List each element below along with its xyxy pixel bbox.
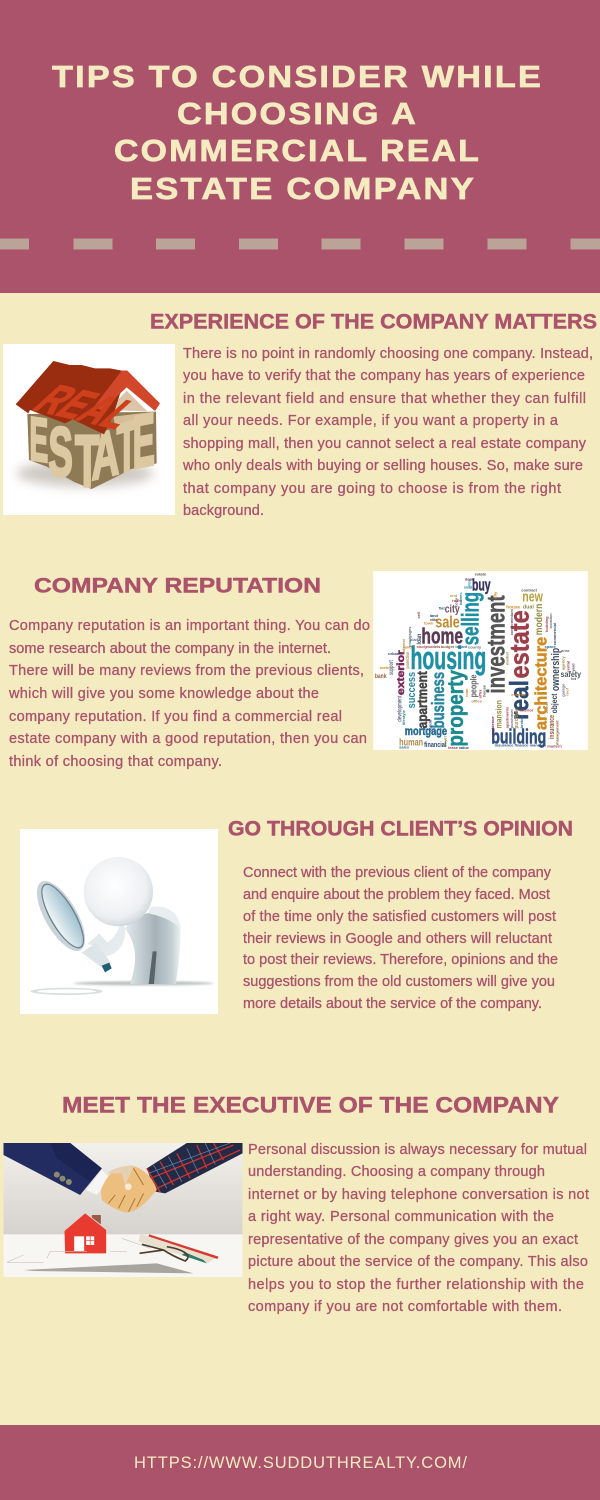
image: housing word cloud: interest: [401, 638, 406, 654]
image: housing word cloud: suite: [380, 665, 390, 670]
image: housing word cloud: insurance: [547, 715, 556, 739]
image: housing word cloud: urban: [388, 651, 400, 656]
heading: go through client's opinion: GO THROUGH CLIENT’S OPINION: [228, 818, 573, 840]
text block: client's opinion: to post their reviews. Therefore, opinions and the: [243, 952, 558, 968]
image: housing word cloud: county: [468, 645, 482, 650]
text block: experience: in the relevant field and ensure that whether they can fulfill: [183, 391, 586, 407]
image: housing word cloud: mortgages: [407, 626, 412, 647]
image: housing word cloud: selling: [458, 592, 485, 645]
image: real estate house: T: [75, 421, 99, 503]
image: housing word cloud: study: [416, 644, 428, 649]
text block: executive: Personal discussion is always necessary for mutual: [248, 1142, 587, 1158]
footer url: HTTPS://WWW.SUDDUTHREALTY.COM/: [134, 1454, 467, 1472]
image: housing word cloud: development: [397, 696, 403, 722]
title: COMMERCIAL REAL: [114, 133, 481, 168]
image: housing word cloud: building: [491, 725, 546, 748]
image: housing word cloud: business: [428, 672, 448, 728]
text block: client's opinion: their reviews in Google and others will reluctant: [243, 931, 552, 947]
image: housing word cloud: models: [426, 644, 441, 649]
image: housing word cloud: home: [421, 624, 463, 649]
image: housing word cloud: buyer: [442, 735, 447, 747]
image: housing word cloud: agency: [561, 656, 566, 670]
image: housing word cloud: city: [492, 591, 497, 599]
image: housing word cloud: purchase: [514, 708, 520, 728]
image: housing word cloud: exterior: [511, 692, 526, 697]
text block: experience: shopping mall, then you cannot select a real estate company: [183, 436, 587, 452]
image: housing word cloud: villa: [430, 617, 438, 622]
text block: reputation: [8, 618, 370, 770]
image: housing word cloud: land: [403, 645, 412, 650]
text block: client's opinion: more details about the service of the company.: [243, 996, 542, 1012]
image: housing word cloud: people: [468, 674, 478, 697]
image: housing word cloud: mortgage: [405, 724, 447, 738]
image: housing word cloud: apartment: [414, 671, 430, 728]
image: housing word cloud: room: [452, 598, 462, 603]
image: housing word cloud: object: [550, 693, 559, 713]
image: real estate house: A: [92, 415, 119, 495]
image: housing word cloud: rent: [450, 593, 458, 598]
text block: reputation: which will give you some knowledge about the: [8, 686, 319, 702]
image: housing word cloud: sold: [464, 585, 472, 590]
text block: experience: who only deals with buying or selling houses. So, make sure: [182, 458, 583, 474]
image: figure with magnifying glass: [20, 829, 218, 1014]
image: housing word cloud: real: [506, 680, 534, 720]
image: housing word cloud: lease: [448, 745, 459, 750]
image: housing word cloud: flat: [439, 605, 445, 610]
text block: executive: helps you to stop the further relationship with the: [248, 1277, 584, 1293]
image: housing word cloud: mansion: [494, 700, 503, 728]
image: housing word cloud: house: [506, 605, 520, 610]
image: housing word cloud: exterior: [396, 650, 407, 695]
image: housing word cloud: housing: [410, 640, 486, 676]
text block: reputation: company reputation. If you find a commercial real: [9, 709, 342, 725]
image: real estate house: E: [29, 404, 48, 476]
image: housing word cloud: building: [544, 616, 549, 632]
image: housing word cloud: offer: [477, 689, 482, 698]
dashed divider: [0, 238, 600, 250]
image: housing word cloud: dual: [523, 605, 534, 611]
image: housing word cloud: support: [388, 660, 395, 675]
text block: client's opinion: suggestions from the old customers will give you: [243, 974, 555, 990]
title: CHOOSING A: [177, 96, 418, 131]
image: housing word cloud: lifestyle: [401, 709, 406, 725]
image: housing word cloud: modern: [547, 744, 562, 749]
image: housing word cloud: commercial: [552, 623, 557, 645]
title: ESTATE COMPANY: [130, 171, 476, 206]
text block: executive: representative of the company gives you an exact: [248, 1232, 578, 1248]
text block: client's opinion: and enquire about the problem they faced. Most: [243, 887, 550, 903]
image: housing word cloud: land: [430, 613, 439, 618]
image: housing word cloud: condominium: [509, 609, 514, 635]
image: housing word cloud: area: [561, 648, 570, 653]
image: housing word cloud: value: [459, 745, 470, 750]
text block: client's opinion: of the time only the satisfied customers will post: [243, 909, 556, 925]
text block: reputation: Company reputation is an important thing. You can do: [9, 618, 370, 634]
image: housing word cloud: location: [548, 613, 553, 629]
image: housing word cloud: homes: [458, 592, 463, 605]
image: housing word cloud: modern: [534, 604, 545, 635]
image: housing word cloud: rental: [566, 661, 571, 672]
image: housing word cloud: town: [424, 621, 434, 626]
header band: [0, 0, 600, 293]
text block: experience: [182, 346, 593, 519]
image: housing word cloud: cozy: [453, 597, 458, 607]
image: housing word cloud: estate: [504, 610, 535, 678]
image: housing word cloud: management: [555, 720, 560, 745]
image: housing word cloud: market: [505, 651, 510, 665]
image: housing word cloud: yard: [570, 663, 575, 672]
text block: executive: picture about the service of the company. This also: [248, 1254, 588, 1270]
text block: executive: company if you are not comfortable with them.: [248, 1299, 562, 1315]
image: housing word cloud: bank: [375, 673, 387, 680]
image: housing word cloud: property: [443, 670, 468, 747]
image: housing word cloud: garage: [561, 683, 566, 697]
image: housing word cloud: budget: [441, 644, 455, 649]
image: housing word cloud: human: [399, 737, 423, 748]
image: housing word cloud: estate: [475, 571, 487, 576]
image: housing word cloud: [373, 571, 588, 750]
text block: experience: background.: [183, 503, 264, 519]
image: housing word cloud: success: [406, 672, 418, 708]
title: TIPS TO CONSIDER WHILE: [52, 59, 543, 94]
text block: executive: understanding. Choosing a company through: [248, 1164, 545, 1180]
image: housing word cloud: residence: [490, 716, 495, 735]
image: housing word cloud: new: [522, 589, 543, 605]
image: housing word cloud: insurance finance mansion: [495, 743, 547, 748]
image: housing word cloud: sell: [416, 612, 421, 619]
image: housing word cloud: buy: [472, 575, 491, 594]
image: housing word cloud: contract: [521, 587, 538, 592]
text block: executive: a right way. Personal communication with the: [248, 1209, 554, 1225]
text block: experience: that company you are going to choose is from the right: [183, 481, 561, 497]
image: housing word cloud: purchaser: [509, 709, 514, 728]
heading: company reputation: COMPANY REPUTATION: [34, 574, 321, 598]
image: housing word cloud: roof: [565, 687, 570, 696]
text block: client's opinion: Connect with the previous client of the company: [243, 865, 552, 881]
image: housing word cloud: office: [471, 698, 483, 703]
text block: experience: all your needs. For example, if you want a property in a: [183, 413, 559, 429]
image: housing word cloud: loan: [464, 688, 469, 697]
image: housing word cloud: deal: [465, 576, 473, 581]
image: housing word cloud: space: [545, 644, 557, 649]
text block: client's opinion: [243, 865, 558, 1012]
title: [52, 59, 543, 206]
text block: reputation: think of choosing that company.: [9, 754, 222, 770]
text block: reputation: some research about the company in the internet.: [9, 641, 331, 657]
image: housing word cloud: condo: [427, 719, 432, 732]
image: housing word cloud: interior: [520, 708, 534, 713]
heading: meet the executive of the company: MEET THE EXECUTIVE OF THE COMPANY: [62, 1092, 559, 1118]
heading: experience of the company matters: EXPERIENCE OF THE COMPANY MATTERS: [150, 310, 597, 334]
image: housing word cloud: ownership: [550, 647, 562, 691]
image: housing word cloud: apartments: [505, 706, 510, 728]
image: housing word cloud: financial: [424, 740, 446, 749]
footer band: [0, 1425, 600, 1500]
image: housing word cloud: sales: [399, 745, 410, 750]
text block: reputation: estate company with a good reputation, then you can: [9, 731, 367, 747]
text block: executive: [248, 1142, 590, 1315]
image: housing word cloud: loan: [416, 634, 423, 645]
image: housing word cloud: owner: [544, 701, 549, 713]
image: housing word cloud: tenant: [455, 644, 468, 649]
image: housing word cloud: price: [467, 578, 472, 589]
image: housing word cloud: broker: [519, 716, 524, 728]
text block: executive: internet or by having telephone conversation is not: [248, 1187, 589, 1203]
text block: reputation: There will be many reviews from the previous clients,: [9, 663, 364, 679]
image: real estate house: E: [133, 399, 155, 485]
image: real estate house: [3, 344, 175, 515]
image: housing word cloud: plan: [410, 637, 419, 642]
image: real estate house: S: [48, 412, 73, 491]
image: housing word cloud: protection: [405, 652, 410, 668]
image: housing word cloud: house: [482, 684, 487, 697]
text block: experience: There is no point in randomly choosing one company. Instead,: [183, 346, 593, 362]
image: real estate house: T: [117, 405, 137, 489]
image: housing word cloud: architecture: [532, 637, 551, 730]
image: housing word cloud: lot: [571, 676, 577, 681]
image: housing word cloud: sale: [435, 613, 460, 632]
text block: experience: you have to verify that the company has years of experience: [183, 368, 585, 384]
image: housing word cloud: city: [445, 604, 460, 616]
image: housing word cloud: safety: [561, 670, 582, 679]
image: handshake over red house: [4, 1143, 242, 1277]
